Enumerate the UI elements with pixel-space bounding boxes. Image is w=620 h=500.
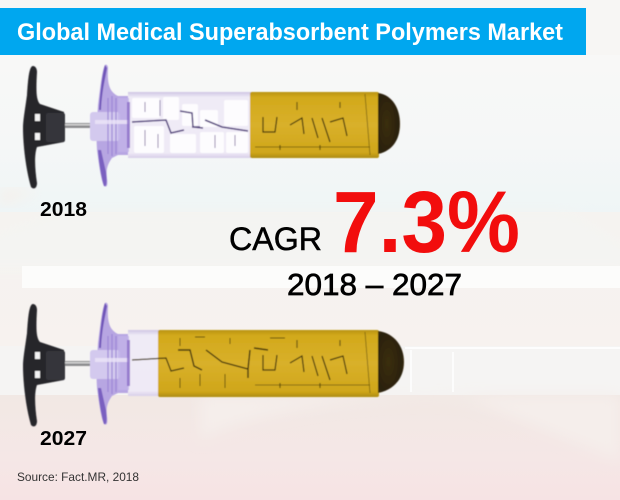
source note: Source: Fact.MR, 2018	[17, 470, 139, 484]
CAGR label: CAGR	[229, 221, 322, 257]
title banner: Global Medical Superabsorbent Polymers Market	[17, 19, 563, 46]
syringe 2018	[23, 65, 400, 188]
syringe 2027	[23, 303, 404, 426]
CAGR value: 7.3%	[333, 174, 520, 271]
title banner	[0, 8, 586, 55]
year label 2027: 2027	[40, 428, 87, 450]
period label: 2018 – 2027	[287, 267, 462, 302]
year label 2018: 2018	[40, 199, 87, 221]
